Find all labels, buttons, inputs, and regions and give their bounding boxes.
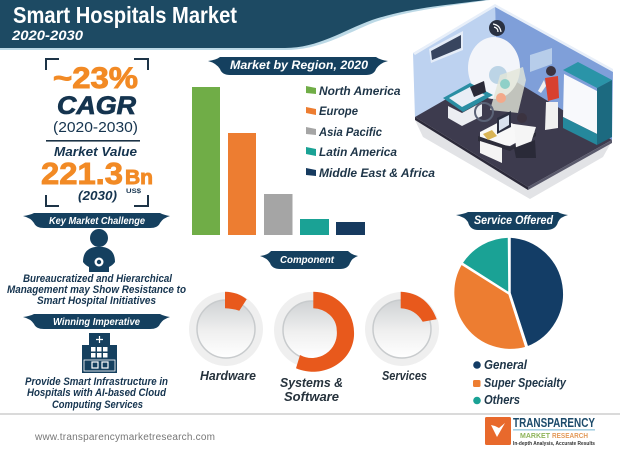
heading: winning imperative <box>23 314 170 329</box>
legend: regions <box>306 84 435 180</box>
legend: service offered: Others <box>484 393 520 407</box>
donut: services <box>365 292 439 383</box>
text: winning imperative description <box>25 376 168 411</box>
donut: hardware <box>189 292 263 383</box>
label: Hardware <box>200 369 256 383</box>
bar chart: market by region <box>192 87 365 235</box>
donut: systems and software <box>274 292 354 404</box>
legend: regions: Asia Pacific <box>318 125 382 139</box>
heading: winning imperative: Winning Imperative <box>53 316 140 328</box>
header banner <box>0 0 490 50</box>
currency: US$ <box>126 188 141 195</box>
icon: hospital building <box>82 333 117 373</box>
heading: market by region <box>208 57 388 75</box>
CAGR label: CAGR <box>57 92 136 120</box>
market value year: (2030) <box>78 189 117 203</box>
title: Smart Hospitals Market <box>13 2 237 28</box>
text: winning imperative description: Computing Services <box>52 399 143 411</box>
market value unit: Bn <box>125 167 153 189</box>
icon: manager person <box>83 229 115 272</box>
legend: service offered: Super Specialty <box>484 376 567 390</box>
CAGR period: (2020-2030) <box>53 119 138 136</box>
text: winning imperative description: Provide Smart Infrastructure in <box>25 376 168 388</box>
heading: service offered <box>456 212 568 230</box>
market value figure: 221.3 <box>41 156 123 191</box>
heading: market by region: Market by Region, 2020 <box>230 58 368 72</box>
text: winning imperative description: Hospitals with AI-based Cloud <box>27 387 166 399</box>
legend: service offered: General <box>484 358 527 372</box>
market value label: Market Value <box>54 145 137 159</box>
legend: regions: North America <box>319 84 401 98</box>
subtitle years: 2020-2030 <box>11 27 83 43</box>
text: challenge description: Management may Show Resistance to <box>7 284 186 296</box>
logo: transparency market research: TRANSPARENCY <box>513 416 596 430</box>
logo: transparency market research: In-depth Analysis, Accurate Results <box>513 441 595 447</box>
corner brackets <box>46 59 148 206</box>
illustration: smart hospital room <box>413 4 613 199</box>
label: Software <box>284 389 339 404</box>
label: Systems & <box>280 375 343 390</box>
pie chart: service offered <box>454 237 564 350</box>
heading: key market challenge <box>23 213 170 228</box>
heading: component: Component <box>280 254 334 266</box>
legend: service offered <box>473 358 567 407</box>
panel: CAGR and market value <box>41 59 153 206</box>
label: Services <box>382 369 427 383</box>
heading: service offered: Service Offered <box>474 215 554 227</box>
logo: transparency market research: RESEARCH <box>552 431 588 440</box>
footer website url: www.transparencymarketresearch.com <box>34 432 215 443</box>
legend: regions: Middle East & Africa <box>319 166 435 180</box>
label <box>280 375 343 404</box>
text: challenge description: Smart Hospital Initiatives <box>37 295 156 307</box>
legend: regions: Europe <box>319 104 358 118</box>
logo: transparency market research <box>485 416 596 447</box>
text: challenge description: Bureaucratized and Hierarchical <box>23 273 173 285</box>
legend: regions: Latin America <box>319 145 397 159</box>
logo: transparency market research: MARKET <box>520 431 550 440</box>
CAGR percentage: ~23% <box>53 62 138 95</box>
heading: key market challenge: Key Market Challenge <box>49 215 145 227</box>
heading: component <box>260 251 358 269</box>
text: challenge description <box>7 273 186 307</box>
